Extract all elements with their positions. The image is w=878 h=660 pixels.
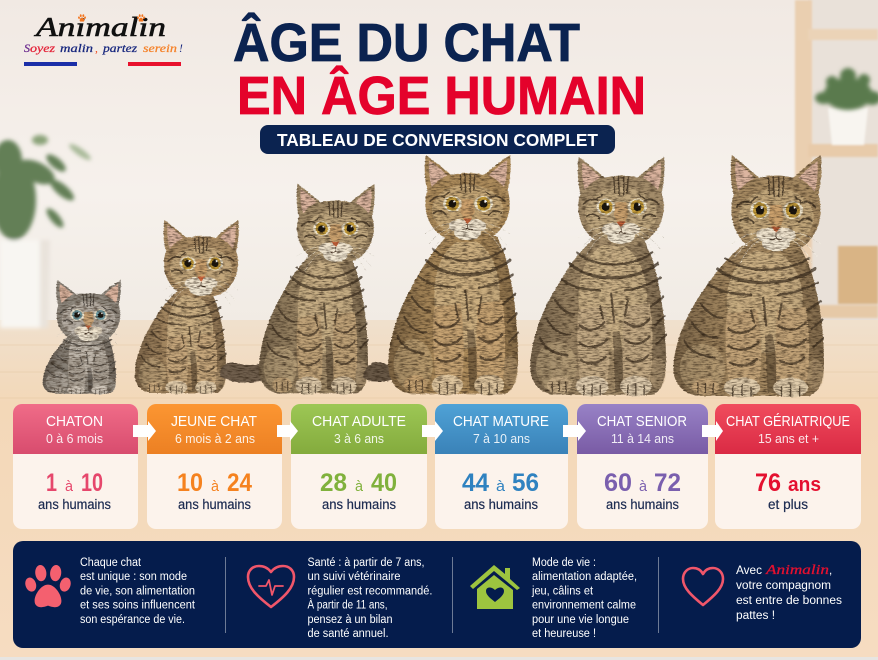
card: jeune chat (147, 404, 282, 529)
card: chat senior: à (639, 478, 648, 495)
card: chat gériatrique (715, 404, 861, 529)
card: chat adulte: 28 (320, 469, 347, 497)
text: chaque chat: et ses soins influencent (80, 600, 196, 612)
card: chat adulte: à (355, 478, 364, 495)
cat 6: chat gériatrique (673, 155, 824, 397)
icon: paw left (78, 14, 86, 22)
card: chaton (13, 404, 138, 529)
subtitle pill: TABLEAU DE CONVERSION COMPLET (277, 130, 598, 150)
card: chat gériatrique: 76 (755, 469, 781, 497)
card: chat senior: 11 à 14 ans (611, 432, 674, 446)
card: chaton: 0 à 6 mois (46, 432, 103, 446)
text: santé: pensez à un bilan (308, 614, 392, 626)
text: chaque chat: son espérance de vie. (80, 614, 185, 626)
card: jeune chat: JEUNE CHAT (171, 413, 257, 430)
text: mode de vie: environnement calme (532, 600, 636, 612)
card: chat gériatrique: ans (788, 474, 821, 496)
text: mode de vie: pour une vie longue (532, 614, 629, 626)
cat 2: jeune chat (135, 220, 239, 394)
card: chat adulte: ans humains (322, 497, 396, 512)
text: santé (308, 557, 432, 640)
logo tagline: S (24, 43, 30, 55)
card: chat gériatrique: et plus (768, 497, 808, 512)
text: avec animalin (736, 563, 842, 622)
title line 1: ÂGE DU CHAT (233, 12, 580, 73)
info panel (13, 541, 861, 648)
card: chat gériatrique: 15 ans et + (758, 432, 819, 446)
title (233, 12, 646, 126)
card: chat senior: ans humains (606, 497, 679, 512)
title line 2: EN ÂGE HUMAIN (237, 65, 646, 126)
card: chat mature: 7 à 10 ans (473, 432, 530, 446)
text: mode de vie (531, 557, 637, 640)
logo tagline (24, 43, 183, 55)
logo tagline: malin (60, 43, 93, 55)
card: chat senior (577, 404, 708, 529)
text: mode de vie: Mode de vie : (532, 557, 596, 569)
logo tagline: ! (179, 43, 183, 55)
icon: heart pulse (248, 566, 294, 607)
text: avec animalin: pattes ! (736, 610, 775, 622)
card: jeune chat: à (211, 478, 220, 495)
card: chat mature: à (496, 478, 506, 495)
card: chaton: 1 (46, 469, 57, 497)
logo tagline: oyez (30, 43, 56, 55)
card: jeune chat: 10 (177, 469, 203, 497)
logo name: Animalin (33, 12, 166, 42)
text: avec animalin: Animalin (765, 563, 829, 578)
text: chaque chat: est unique : son mode (80, 571, 187, 583)
card: jeune chat: 6 mois à 2 ans (175, 432, 255, 446)
text: mode de vie: et heureuse ! (532, 628, 596, 640)
text: chaque chat: Chaque chat (80, 557, 142, 569)
text: avec animalin: votre compagnom (736, 580, 831, 592)
text: mode de vie: alimentation adaptée, (532, 571, 637, 583)
cards (13, 404, 861, 529)
card: chat senior: 60 (604, 469, 632, 497)
plant left (0, 135, 93, 328)
card: chaton: 10 (81, 469, 103, 497)
card: chat senior: 72 (654, 469, 681, 497)
card: chat mature: CHAT MATURE (453, 413, 549, 430)
card: chat adulte: 3 à 6 ans (334, 432, 384, 446)
text: avec animalin: Avec (736, 565, 762, 577)
card: chat adulte (291, 404, 427, 529)
text: santé: Santé : à partir de 7 ans, (308, 557, 424, 569)
text: avec animalin: est entre de bonnes (736, 595, 842, 607)
card: chat mature: 44 (462, 469, 489, 497)
text: santé: régulier est recommandé. (308, 586, 432, 598)
card: chat mature: 56 (512, 469, 539, 497)
subtitle pill (260, 125, 615, 154)
cat 4: chat mature (363, 155, 518, 395)
icon: paw right (137, 14, 145, 22)
icon: house (470, 565, 520, 609)
card: chaton: CHATON (46, 413, 103, 430)
card: jeune chat: ans humains (178, 497, 251, 512)
logo tagline: , (95, 43, 98, 55)
logo Animalin (24, 12, 183, 66)
logo tagline: partez (102, 43, 138, 55)
card: chat senior: CHAT SENIOR (597, 413, 687, 430)
icon: heart outline (683, 568, 723, 605)
shelf right (795, 0, 878, 320)
card: jeune chat: 24 (227, 469, 252, 497)
card: chaton: ans humains (38, 497, 111, 512)
card: chat mature (435, 404, 568, 529)
text: chaque chat (80, 557, 196, 626)
cat 1: chaton (43, 280, 121, 394)
text: santé: À partir de 11 ans, (308, 598, 388, 612)
text: santé: un suivi vétérinaire (308, 571, 400, 583)
text: chaque chat: de vie, son alimentation (80, 586, 195, 598)
card: chat mature: ans humains (464, 497, 538, 512)
text: avec animalin: , (829, 565, 832, 577)
card: chaton: à (65, 478, 74, 495)
cat 3: chat adulte (220, 184, 375, 395)
text: mode de vie: jeu, câlins et (531, 586, 594, 598)
card: chat adulte: CHAT ADULTE (312, 413, 406, 430)
card: chat gériatrique: CHAT GÉRIATRIQUE (726, 413, 850, 430)
card: chat adulte: 40 (371, 469, 397, 497)
cat 5: chat senior (530, 157, 666, 396)
cats row (43, 155, 824, 397)
text: santé: de santé annuel. (308, 628, 388, 640)
icon: paw (24, 564, 72, 607)
arrows between cards (133, 421, 723, 441)
logo tagline: serein (143, 43, 177, 55)
